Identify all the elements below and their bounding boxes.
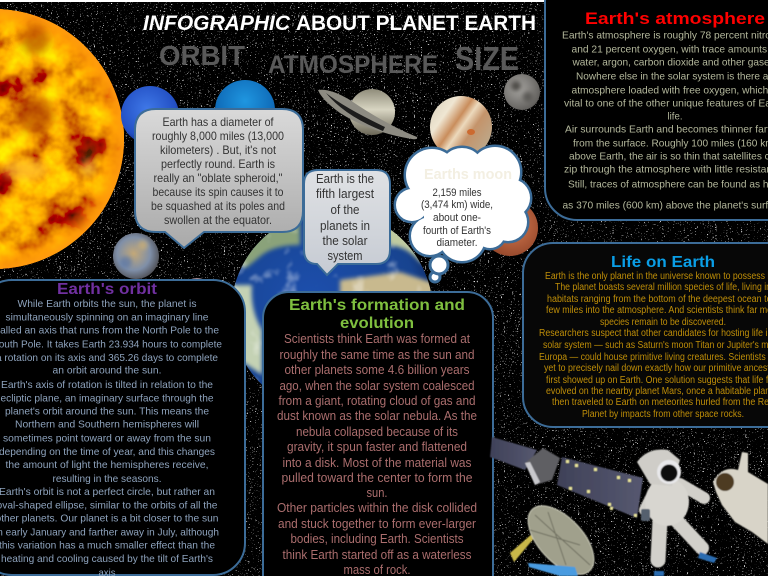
panel: Earth's formation and evolution <box>263 292 493 576</box>
callout: Earth's diameter: roughly 8,000 miles (13,000 <box>152 129 284 143</box>
panel: Earth's atmosphere <box>545 0 768 220</box>
panel: Earth's formation and evolution: Other particles within the disk collided <box>277 501 477 515</box>
panel: Earth's orbit: oval-shaped ellipse, similar to the orbits of all the <box>0 500 218 512</box>
thought cloud: Earth's moon: (3,474 km) wide, <box>421 199 493 211</box>
heading: Earth's formation and evolution: Earth's formation and <box>289 297 465 314</box>
thought cloud: Earth's moon: Earths moon <box>424 166 512 183</box>
illustration: Mars <box>482 200 538 256</box>
callout: Earth's diameter <box>135 109 303 248</box>
panel: Earth's formation and evolution: and stuck together to form ever-larger <box>278 517 476 531</box>
heading: Earth's formation and evolution <box>289 297 465 332</box>
illustration: Mercury <box>113 233 159 279</box>
callout: Earth's diameter: be squashed at its poles and <box>151 199 285 213</box>
illustration: sun <box>0 9 124 269</box>
panel: Earth's formation and evolution: sun. <box>366 486 388 500</box>
callout: Earth's diameter: because its spin causes it to <box>152 185 284 199</box>
panel: Earth's formation and evolution: pulled toward the center to form the <box>282 471 473 485</box>
callout: fifth largest: of the <box>330 203 360 217</box>
panel: Earth's orbit: a rotation on its axis and 365.26 days to complete <box>0 352 218 364</box>
panel: Earth's orbit: heating and cooling caused by the tilt of Earth's <box>1 553 213 565</box>
illustration: Moon <box>504 74 540 110</box>
panel: Earth's formation and evolution: nebula collapsed because of its <box>296 425 458 439</box>
panel: Earth's orbit: in early January and farther away in July, although <box>0 526 219 538</box>
illustration: Jupiter <box>430 96 492 158</box>
heading: Earth's formation and evolution: evolution <box>340 315 414 332</box>
panel: Earth's formation and evolution: dust known as the solar nebula. As the <box>277 409 477 423</box>
panel: Earth's orbit: Earth's orbit is not a perfect circle, but rather an <box>0 486 215 498</box>
panel: Earth's orbit: an orbit around the sun. <box>52 364 162 376</box>
callout: Earth's diameter: Earth has a diameter of <box>162 115 274 129</box>
illustration: satellite with solar panels <box>490 437 643 518</box>
panel: Earth's orbit: Northern and Southern hemispheres will <box>15 418 199 430</box>
panel: Earth's orbit: ecliptic plane, an imaginary surface through the <box>0 392 214 404</box>
panel: Earth's formation and evolution: bodies, including Earth. Scientists <box>290 532 464 546</box>
title: ABOUT PLANET EARTH <box>296 12 536 35</box>
callout: fifth largest: Earth is the <box>316 172 374 186</box>
panel: Life on Earth: species remain to be discovered. <box>600 317 726 328</box>
panel: Earth's atmosphere: life. <box>668 110 682 122</box>
heading: atmosphere: ATMOSPHERE <box>268 51 438 79</box>
callout: Earth's diameter: kilometers) . But, it's not <box>160 143 277 157</box>
illustration: Saturn <box>318 89 417 139</box>
panel: Earth's orbit <box>0 280 245 576</box>
panel: Earth's orbit: simultaneously spinning on an imaginary line <box>6 312 209 324</box>
panel: Earth's formation and evolution: roughly the same time as the sun and <box>280 348 475 362</box>
callout: Earth's diameter: swollen at the equator. <box>164 213 272 227</box>
panel: Life on Earth: Planet by impacts from other space rocks. <box>582 409 744 420</box>
panel: Earth's orbit: the amount of light the hemispheres receive, <box>6 459 208 471</box>
illustration: Uranus <box>215 80 275 140</box>
thought cloud: Earth's moon: fourth of Earth's <box>423 225 491 237</box>
callout: fifth largest: the solar <box>322 234 368 248</box>
illustration: satellite dish <box>510 494 606 576</box>
callout: Earth's diameter: perfectly round. Earth is <box>161 157 275 171</box>
panel: Earth's orbit: called an axis that runs from the North Pole to the <box>0 324 219 336</box>
thought cloud: Earth's moon: diameter. <box>436 237 478 249</box>
callout: fifth largest: planets in <box>320 219 370 233</box>
illustration: Earth <box>234 220 431 384</box>
panel: Earth's orbit: Earth's axis of rotation is tilted in relation to the <box>1 379 213 391</box>
illustration: Venus <box>179 278 215 314</box>
heading: Earth's atmosphere: Earth's atmosphere <box>585 10 765 28</box>
callout: fifth largest: system <box>328 249 362 263</box>
heading: size: SIZE <box>455 40 519 77</box>
panel: Earth's orbit: sometimes point toward or away from the sun <box>3 432 211 444</box>
panel: Earth's orbit: While Earth orbits the sun, the planet is <box>18 298 196 310</box>
heading: Earth's orbit: Earth's orbit <box>57 281 157 298</box>
illustration: second astronaut <box>713 452 768 544</box>
panel: Earth's formation and evolution: other planets some 4.6 billion years <box>284 363 470 377</box>
callout: fifth largest <box>304 170 390 275</box>
panel: Earth's orbit: depending on the time of year, and this changes <box>0 446 215 458</box>
heading: Life on Earth: Life on Earth <box>611 254 715 271</box>
title <box>143 12 536 35</box>
panel: Earth's formation and evolution: gravity, it spun faster and flattened <box>287 440 467 454</box>
panel: Earth's formation and evolution: from a giant, rotating cloud of gas and <box>278 394 476 408</box>
callout: Earth's diameter: really an "oblate spheroid," <box>154 171 282 185</box>
panel: Earth's formation and evolution: into a disk. Most of the material was <box>282 456 472 470</box>
panel: Earth's orbit: this variation has a much smaller effect than the <box>0 540 215 552</box>
illustration: astronaut floating <box>637 450 717 576</box>
thought cloud: Earth's moon <box>395 146 531 282</box>
heading: orbit: ORBIT <box>159 40 245 71</box>
panel: Life on Earth <box>523 243 768 427</box>
panel: Earth's formation and evolution: Scientists think Earth was formed at <box>284 332 470 346</box>
panel: Earth's orbit: planet's orbit around the sun. This means the <box>5 406 209 418</box>
thought cloud: Earth's moon: about one- <box>433 212 481 224</box>
illustration: Neptune <box>121 86 179 144</box>
panel: Earth's formation and evolution: ago, when the solar system coalesced <box>280 379 475 393</box>
thought cloud: Earth's moon: 2,159 miles <box>432 187 482 199</box>
panel: Earth's formation and evolution: think Earth started off as a waterless <box>282 548 472 562</box>
panel: Earth's orbit: other planets. Our planet is a bit closer to the sun <box>0 512 219 524</box>
title: INFOGRAPHIC <box>143 12 291 35</box>
panel: Earth's orbit: resulting in the seasons. <box>52 473 162 485</box>
callout: fifth largest: fifth largest <box>316 187 374 201</box>
